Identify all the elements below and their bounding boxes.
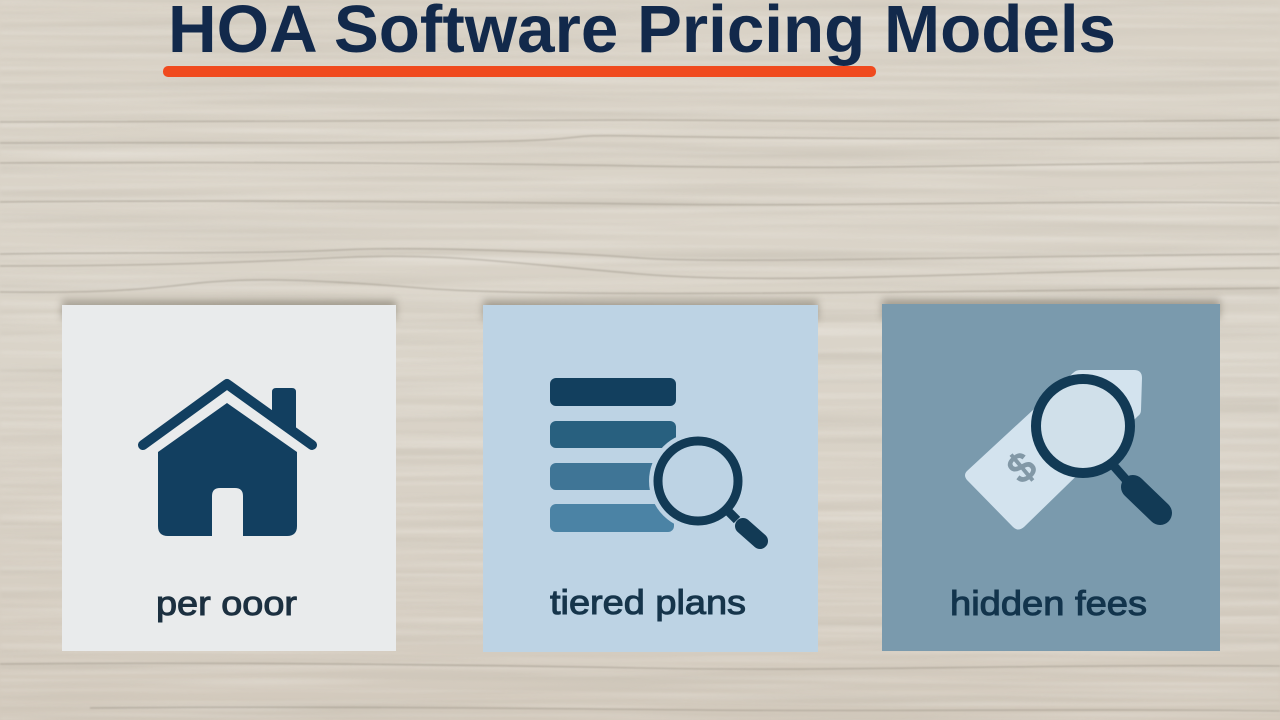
icon: house	[143, 384, 312, 536]
panel: per door	[62, 300, 396, 651]
icon: tier bars with magnifier	[550, 378, 760, 541]
icon: dollar sign: $	[999, 444, 1045, 492]
panel: tiered plans	[483, 300, 818, 652]
label: hidden fees: hidden fees	[950, 585, 1147, 623]
label: per door: per ooor	[156, 585, 297, 623]
icon: price tag with magnifier	[965, 370, 1160, 530]
panel: hidden fees	[882, 299, 1220, 651]
label: tiered plans: tiered plans	[550, 584, 746, 622]
title underline	[163, 66, 876, 77]
